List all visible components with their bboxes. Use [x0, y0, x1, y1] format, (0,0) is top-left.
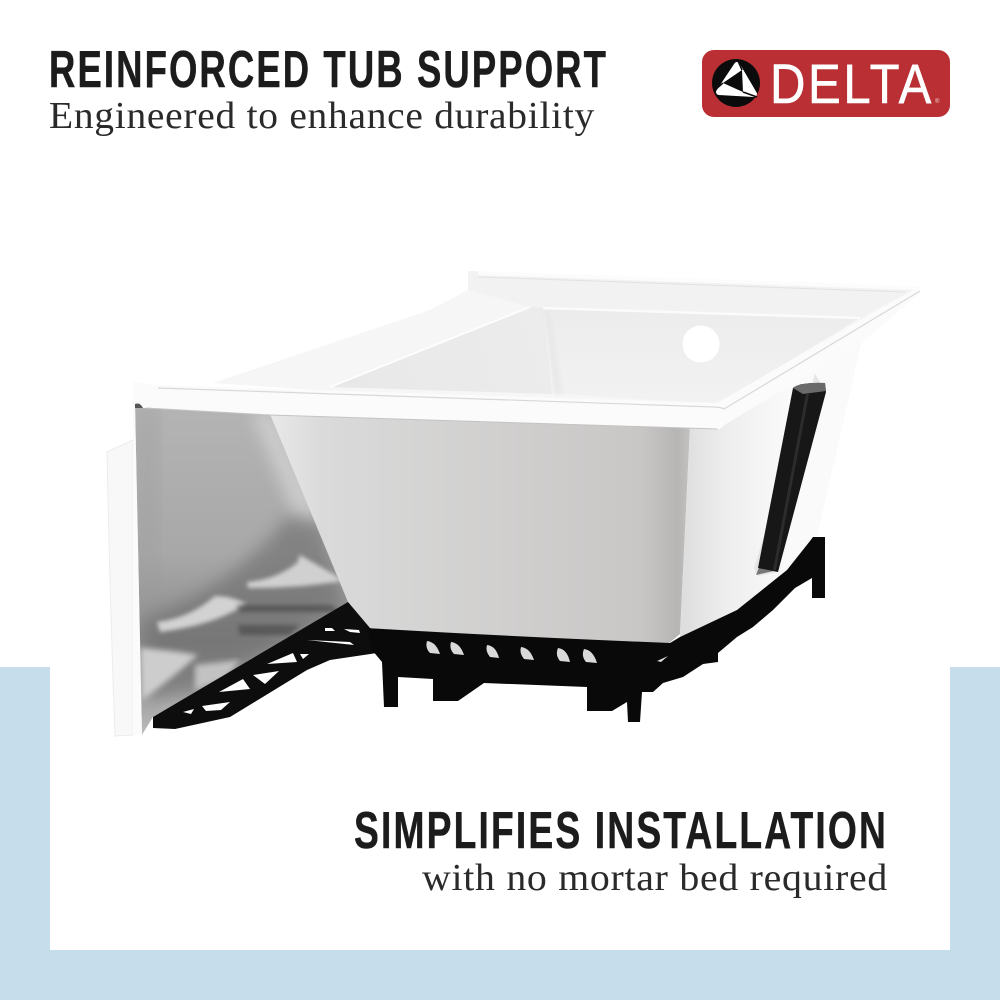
drain hole: [682, 326, 720, 362]
gasket behind overflow panel: [754, 374, 826, 576]
deck of tub: [213, 271, 918, 407]
end panel white edge: [133, 403, 142, 735]
black support base: [367, 537, 825, 722]
end panel flange: [107, 440, 133, 736]
logo: Delta: ®: [935, 98, 940, 105]
subheading: engineered to enhance durability: Engineered to enhance durability: [49, 95, 595, 137]
callout subheading: no mortar bed: with no mortar bed required: [422, 857, 888, 899]
rim highlight lines: [158, 291, 920, 409]
tub illustration: [107, 271, 920, 736]
blue background frame: [0, 667, 1000, 1000]
front rim: [133, 287, 920, 429]
heading: reinforced tub support: REINFORCED TUB SUPPORT: [49, 41, 608, 99]
back deck: [468, 271, 918, 318]
rim underside shadow: [146, 408, 717, 429]
logo: Delta: DELTA: [770, 52, 934, 115]
side truss support: [153, 602, 392, 729]
basin interior: [330, 273, 916, 404]
base drainage holes: [426, 641, 668, 663]
right side of tub: [680, 340, 862, 637]
logo: Delta: [702, 50, 950, 117]
front face of tub: [270, 414, 690, 644]
interior of end panel: [135, 404, 350, 735]
black overflow panel: [756, 383, 826, 575]
rim notch: [135, 404, 143, 408]
